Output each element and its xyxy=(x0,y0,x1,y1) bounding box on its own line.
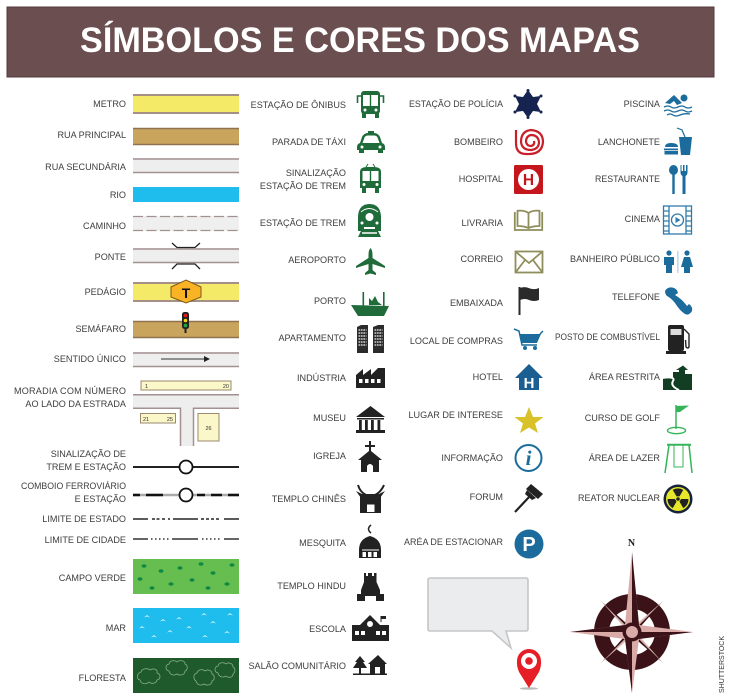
compass rose xyxy=(570,538,693,693)
icon: swing xyxy=(665,445,692,473)
icon: swimmer xyxy=(664,94,692,116)
icon: information: i xyxy=(526,446,532,470)
label: semaforo: SEMÁFARO xyxy=(75,324,126,334)
label: lazer: ÁREA DE LAZER xyxy=(589,453,660,463)
icon: shopping cart xyxy=(514,329,543,350)
column 1: roads and terrain legend xyxy=(14,94,239,693)
title: SÍMBOLOS E CORES DOS MAPAS xyxy=(80,20,640,60)
icon: fire hose xyxy=(516,130,543,154)
label: moradia: MORADIA COM NÚMERO xyxy=(14,386,126,396)
label: reator: REATOR NUCLEAR xyxy=(578,493,660,503)
label: sinalizacao de trem: TREM E ESTAÇÃO xyxy=(46,462,126,472)
label: lanchonete: LANCHONETE xyxy=(598,137,660,147)
icon: school xyxy=(352,615,389,641)
icon: nuclear xyxy=(664,484,692,514)
label: estacionar: ARÉA DE ESTACIONAR xyxy=(404,537,503,547)
label: apartamento: APARTAMENTO xyxy=(278,333,346,343)
swatch: mar xyxy=(133,608,239,643)
swatch: moradia road plan xyxy=(133,381,239,446)
icon: ship xyxy=(351,292,389,316)
label: taxi: PARADA DE TÁXI xyxy=(272,137,346,147)
label: hotel: HOTEL xyxy=(473,372,503,382)
label: informacao: INFORMAÇÃO xyxy=(441,453,503,463)
swatch: rua principal xyxy=(133,128,239,145)
swatch: floresta xyxy=(133,658,239,693)
icon: restricted area xyxy=(662,366,692,390)
label: sinalizacao estacao de trem: SINALIZAÇÃO xyxy=(286,168,346,178)
label: porto: PORTO xyxy=(314,296,346,306)
icon: taxi xyxy=(357,131,385,153)
icon: hindu temple xyxy=(357,573,384,601)
icon: envelope xyxy=(516,252,542,272)
icon: museum xyxy=(356,406,385,433)
label: cinema: CINEMA xyxy=(625,214,661,224)
icon: information xyxy=(516,445,542,471)
icon: phone xyxy=(665,287,692,315)
label: embaixada: EMBAIXADA xyxy=(450,298,504,308)
label: caminho: CAMINHO xyxy=(83,221,126,231)
icon: spoon and fork xyxy=(669,165,688,194)
label: templo hindu: TEMPLO HINDU xyxy=(277,581,346,591)
label: posto: POSTO DE COMBUSTÍVEL xyxy=(555,332,660,342)
swatch: caminho xyxy=(133,216,239,231)
icon: police star xyxy=(514,89,542,119)
label: policia: ESTAÇÃO DE POLÍCIA xyxy=(409,99,504,109)
swatch: moradia road plan: 25 xyxy=(167,417,173,423)
label: igreja: IGREJA xyxy=(313,451,347,461)
icon: snack xyxy=(664,128,692,155)
label: mar: MAR xyxy=(106,623,126,633)
icon: apartments xyxy=(357,325,384,353)
label: rua secundaria: RUA SECUNDÁRIA xyxy=(45,162,127,172)
column 4: amenities xyxy=(555,94,726,693)
swatch: moradia road plan: 1 xyxy=(145,384,148,390)
icon: hotel: H xyxy=(524,375,534,392)
icon: parking: P xyxy=(522,534,536,556)
label: moradia: AO LADO DA ESTRADA xyxy=(25,399,127,409)
label: floresta: FLORESTA xyxy=(79,673,127,683)
label: campo verde: CAMPO VERDE xyxy=(59,573,126,583)
label: banheiro publico: BANHEIRO PÚBLICO xyxy=(570,254,660,264)
swatch: pedagio xyxy=(133,280,239,303)
label: ponte: PONTE xyxy=(95,252,126,262)
swatch: moradia road plan: 21 xyxy=(143,417,149,423)
icon: hospital xyxy=(514,165,543,194)
label: limite de cidade: LIMITE DE CIDADE xyxy=(45,535,126,545)
icon: community hall xyxy=(353,655,387,675)
icon: golf xyxy=(668,405,689,434)
label: metro: METRO xyxy=(93,99,126,109)
icon: flag xyxy=(518,287,539,315)
swatch: semaforo xyxy=(133,312,239,338)
label: rio: RIO xyxy=(110,190,126,200)
label: piscina: PISCINA xyxy=(624,99,661,109)
icon: gavel xyxy=(515,484,543,512)
speech bubble xyxy=(428,578,528,648)
label: interesse: LUGAR DE INTERESE xyxy=(408,410,503,420)
icon: church xyxy=(358,441,382,472)
column 3: services xyxy=(404,89,544,690)
label: sinalizacao de trem: SINALIZAÇÃO DE xyxy=(51,449,126,459)
swatch: ponte xyxy=(133,243,239,269)
icon: hotel xyxy=(515,364,543,392)
icon: airplane xyxy=(356,248,385,275)
label: sentido unico: SENTIDO ÚNICO xyxy=(54,354,126,364)
label: aeroporto: AEROPORTO xyxy=(288,255,346,265)
icon: star xyxy=(514,407,544,433)
label: mesquita: MESQUITA xyxy=(299,538,347,548)
icon: factory xyxy=(356,368,385,388)
label: correio: CORREIO xyxy=(461,254,503,264)
label: comboio: E ESTAÇÃO xyxy=(75,494,126,504)
label: comboio: COMBOIO FERROVIÁRIO xyxy=(21,481,126,491)
label: estacao de trem: ESTAÇÃO DE TREM xyxy=(260,218,346,228)
label: limite de estado: LIMITE DE ESTADO xyxy=(42,514,126,524)
swatch: sentido unico xyxy=(133,352,239,367)
icon: film xyxy=(664,206,692,234)
swatch: comboio xyxy=(133,488,239,502)
label: museu: MUSEU xyxy=(313,413,346,423)
label: pedagio: PEDÁGIO xyxy=(85,287,126,297)
label: templo chines: TEMPLO CHINÊS xyxy=(272,494,346,504)
column 2: transport and buildings xyxy=(248,91,389,675)
title banner xyxy=(7,7,714,77)
icon: mosque xyxy=(359,525,381,558)
swatch: limite de cidade xyxy=(133,538,239,540)
icon: map pin xyxy=(517,649,541,690)
label: rua principal: RUA PRINCIPAL xyxy=(57,130,126,140)
icon: parking xyxy=(514,530,544,558)
icon: bus xyxy=(358,91,384,118)
label: telefone: TELEFONE xyxy=(612,292,660,302)
label: industria: INDÚSTRIA xyxy=(297,373,347,383)
label: golf: CURSO DE GOLF xyxy=(585,413,660,423)
credit: SHUTTERSTOCK xyxy=(719,636,726,693)
swatch: trem e estacao xyxy=(133,460,239,474)
icon: signal train xyxy=(360,164,381,193)
swatch: rio xyxy=(133,187,239,202)
swatch: limite de estado xyxy=(133,518,239,520)
label: bombeiro: BOMBEIRO xyxy=(454,137,503,147)
letter N: N xyxy=(628,538,636,549)
label: restaurante: RESTAURANTE xyxy=(595,174,660,184)
icon: fuel pump xyxy=(666,325,689,354)
swatch: moradia road plan: 20 xyxy=(223,384,229,390)
swatch: pedagio: T xyxy=(182,285,191,301)
swatch: campo verde xyxy=(133,559,239,594)
label: hospital: HOSPITAL xyxy=(459,174,503,184)
label: onibus: ESTAÇÃO DE ÔNIBUS xyxy=(251,100,346,110)
swatch: moradia road plan: 26 xyxy=(205,426,212,432)
swatch: metro xyxy=(133,94,239,114)
label: area restrita: ÁREA RESTRITA xyxy=(589,372,661,382)
label: escola: ESCOLA xyxy=(309,624,347,634)
label: salao comunitario: SALÃO COMUNITÁRIO xyxy=(248,661,346,671)
label: forum: FORUM xyxy=(470,492,503,502)
label: livraria: LIVRARIA xyxy=(462,218,504,228)
swatch: rua secundaria xyxy=(133,158,239,173)
icon: book xyxy=(515,211,542,230)
label: compras: LOCAL DE COMPRAS xyxy=(410,336,503,346)
label: sinalizacao estacao de trem: ESTAÇÃO DE TREM xyxy=(260,181,346,191)
icon: train xyxy=(358,204,381,237)
icon: chinese temple xyxy=(356,485,385,513)
icon: hospital: H xyxy=(523,172,534,189)
icon: restroom xyxy=(664,250,693,273)
